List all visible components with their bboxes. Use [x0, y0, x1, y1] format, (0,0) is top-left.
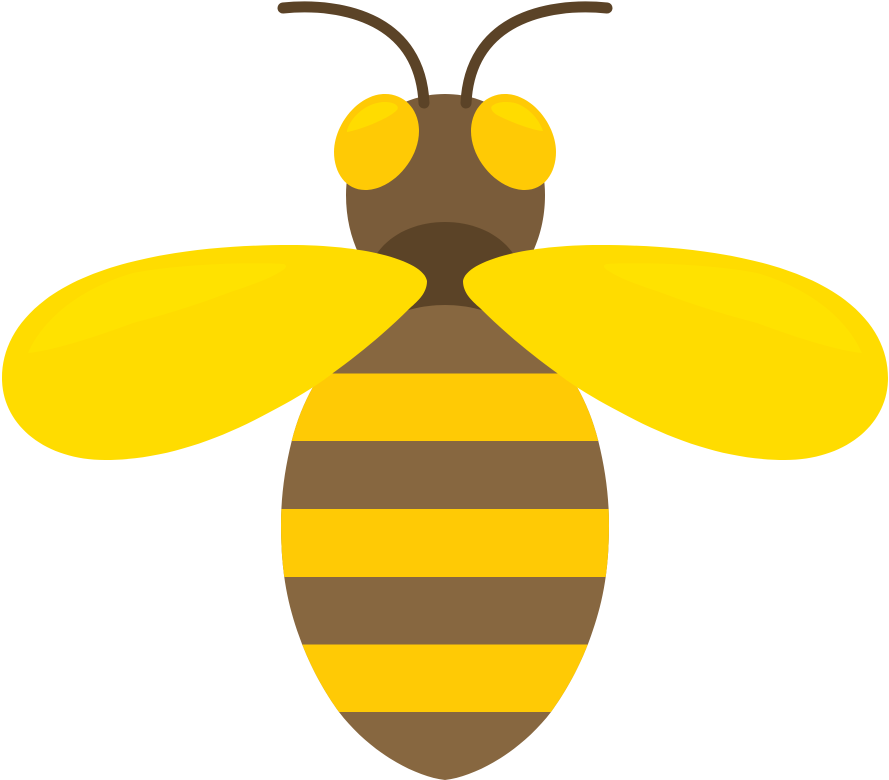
left wing [2, 245, 427, 460]
neck [372, 222, 518, 320]
body with stripes [270, 300, 620, 780]
antennae [283, 7, 607, 103]
right eye [471, 94, 556, 190]
left eye [334, 94, 419, 190]
right wing [463, 245, 888, 460]
head [346, 94, 545, 320]
